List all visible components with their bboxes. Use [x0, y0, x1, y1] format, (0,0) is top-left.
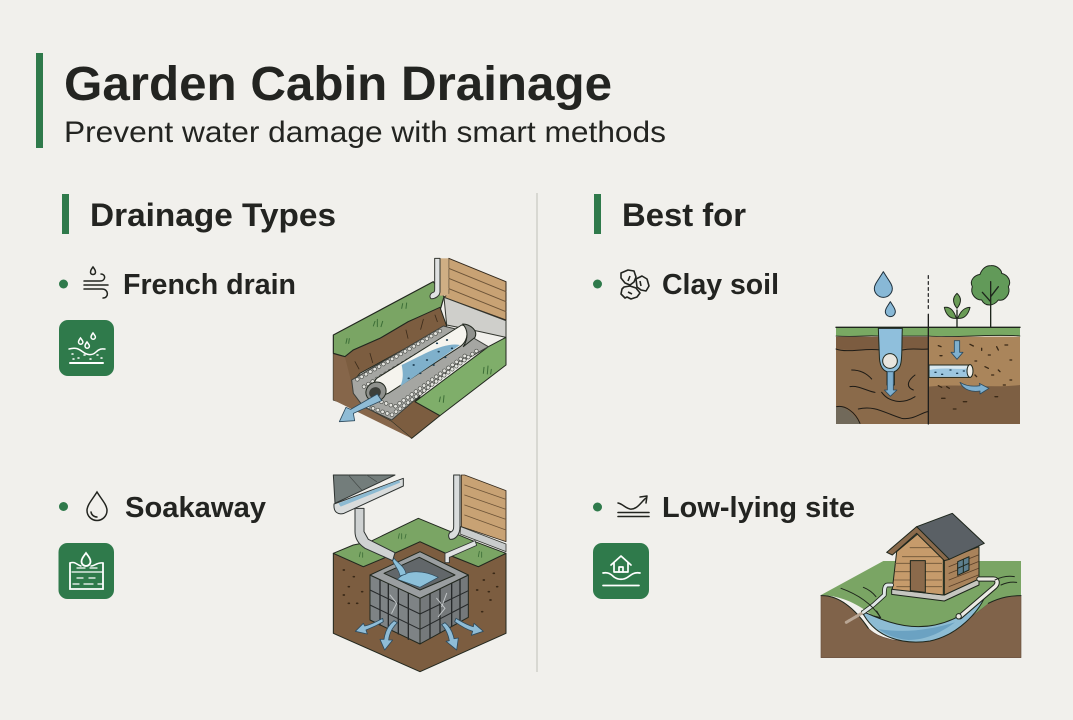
pipe far end	[463, 324, 476, 347]
item: french drain	[59, 267, 296, 376]
gabion top rim	[370, 552, 468, 598]
flow arrows	[841, 587, 881, 618]
heading: best for: Best for	[622, 197, 746, 233]
wall boards	[461, 475, 506, 542]
speckles	[938, 344, 1012, 409]
arrow: down clay	[884, 372, 897, 396]
wall boards	[444, 258, 506, 320]
lawn	[333, 518, 506, 567]
icon: wind and drop	[84, 267, 108, 298]
gabion left face	[370, 575, 420, 644]
divider line	[926, 276, 930, 312]
downpipe left	[355, 508, 395, 561]
cabin side wall	[944, 547, 979, 595]
lawn	[821, 561, 1021, 631]
label: soakaway: Soakaway	[125, 492, 266, 524]
gutter	[334, 478, 403, 514]
icon: house on low ground tile	[593, 543, 649, 599]
drain pipe left	[863, 585, 892, 612]
concrete footing	[444, 297, 506, 337]
icon: water drop	[87, 492, 107, 520]
icon: soil seepage tile	[59, 320, 114, 376]
illustration: clay soil	[836, 266, 1020, 424]
perforated pipe	[929, 365, 970, 377]
illustration: soakaway	[333, 475, 506, 672]
footing	[460, 527, 506, 552]
pipe wrap	[374, 325, 467, 395]
clay channel	[878, 328, 902, 385]
trench soil	[333, 307, 447, 438]
item: low-lying site	[593, 492, 855, 599]
arrow: down sandy	[951, 341, 963, 359]
gravel bed	[352, 326, 488, 420]
plinth	[892, 578, 979, 601]
clay ground	[836, 337, 928, 424]
pond	[862, 597, 985, 642]
cabin door	[910, 561, 925, 592]
pipe water	[400, 345, 460, 387]
arrows: seepage	[355, 618, 483, 650]
item: clay soil	[593, 269, 779, 301]
panel: drainage types	[58, 194, 506, 672]
title accent bar	[36, 53, 43, 148]
arrow: outflow	[339, 394, 382, 422]
soil block	[333, 542, 506, 672]
clay cracks	[836, 349, 928, 423]
title: Garden Cabin Drainage	[64, 58, 612, 111]
far lawn	[333, 282, 444, 357]
gabion right face	[420, 575, 468, 644]
brown ground	[821, 596, 1021, 658]
item: soakaway	[58, 492, 266, 599]
panel: best for	[593, 194, 1021, 658]
roof	[333, 475, 395, 503]
tree	[971, 266, 1010, 327]
sapling	[944, 293, 970, 327]
pipe outlet	[362, 378, 390, 405]
gravel cobbles	[357, 330, 480, 415]
icon: clay lumps	[621, 270, 649, 299]
water drops	[874, 272, 892, 297]
buried outlet	[846, 614, 861, 622]
drain pipe right	[960, 579, 997, 617]
grass tufts	[346, 303, 491, 402]
arrow: sideways	[960, 382, 989, 394]
grass strip	[836, 327, 1020, 336]
subtitle: Prevent water damage with smart methods	[64, 116, 666, 149]
label: clay soil: Clay soil	[662, 269, 779, 301]
sandy ground	[928, 337, 1020, 424]
soakaway water	[397, 572, 438, 587]
icon: water pit tile	[58, 543, 114, 599]
illustration: low-lying site	[821, 513, 1021, 658]
label: low-lying site: Low-lying site	[662, 492, 855, 524]
heading: drainage types: Drainage Types	[90, 197, 336, 233]
cabin window	[958, 557, 969, 575]
downspout	[440, 258, 449, 296]
label: french drain: French drain	[123, 269, 296, 301]
icon: low ground trend	[618, 496, 649, 516]
gabion opening	[384, 557, 455, 590]
cabin front wall	[892, 533, 943, 595]
cabin roof	[917, 513, 984, 559]
near lawn	[415, 337, 506, 416]
illustration: french drain	[333, 258, 506, 438]
downpipe right	[449, 475, 460, 539]
